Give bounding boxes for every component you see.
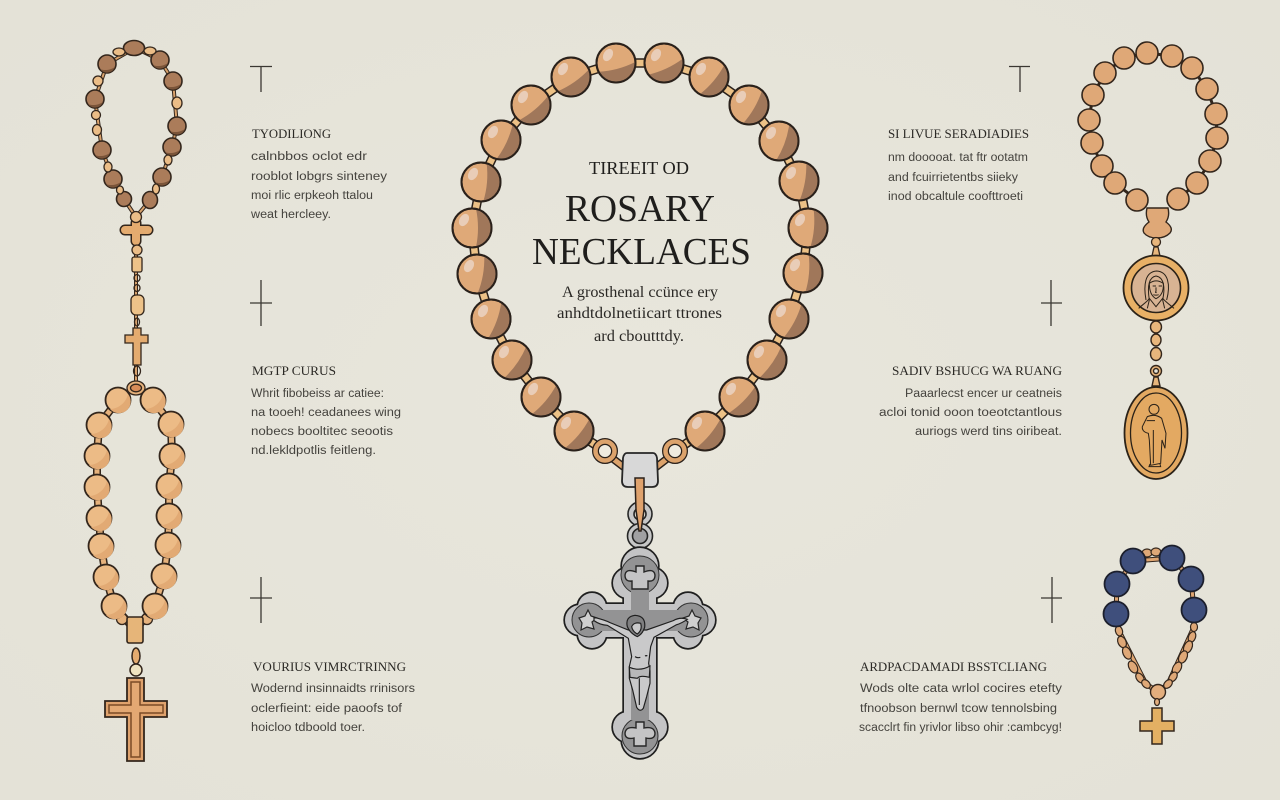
portrait of Mary bbox=[1139, 271, 1174, 308]
mini cross bbox=[1009, 66, 1030, 92]
text block 6: Wods olte cata wrlol cocires etefty bbox=[860, 683, 1062, 695]
text block 2: Whrit fibobeiss ar catiee: bbox=[251, 388, 384, 400]
text block 3: Wodernd insinnaidts rrinisors bbox=[251, 683, 415, 695]
junction bead bbox=[1150, 684, 1166, 706]
portrait medal bbox=[1124, 256, 1188, 320]
gold cross bbox=[1140, 708, 1174, 744]
text block 2: nobecs booltitec seootis bbox=[251, 426, 393, 438]
subtitle: A grosthenal ccünce ery bbox=[562, 284, 718, 301]
text block 4 bbox=[888, 126, 1029, 203]
upper small cross bbox=[125, 223, 148, 241]
crucified figure bbox=[594, 615, 687, 710]
jump rings bbox=[628, 502, 652, 548]
text block 2: MGTP CURUS bbox=[252, 363, 336, 378]
text block 3: hoicloo tdboold toer. bbox=[251, 722, 365, 734]
mini cross bbox=[250, 280, 272, 326]
top-left brown rosary bbox=[86, 40, 186, 395]
saint oval medal bbox=[1124, 387, 1188, 479]
text block 1: moi rlic erpkeoh ttalou bbox=[251, 190, 373, 202]
text block 1: rooblot lobgrs sinteney bbox=[251, 171, 387, 183]
barrel clasp bbox=[127, 617, 143, 643]
central title block bbox=[532, 158, 751, 345]
text block 1: calnbbos oclot edr bbox=[251, 151, 367, 163]
text block 2: nd.lekldpotlis feitleng. bbox=[251, 445, 376, 457]
text block 6: scacclrt fin yrivlor libso ohir :cambcyg! bbox=[859, 722, 1062, 734]
mini cross bbox=[1041, 577, 1062, 623]
text block 6 bbox=[859, 659, 1062, 734]
text block 3: VOURIUS VIMRCTRINNG bbox=[253, 659, 406, 674]
lower-right blue rosary bbox=[1104, 546, 1206, 744]
text block 2: na tooeh! ceadanees wing bbox=[251, 407, 401, 419]
wooden cross bbox=[105, 678, 167, 761]
text block 5: Paaarlecst encer ur ceatneis bbox=[905, 388, 1062, 400]
copper loop bbox=[635, 478, 644, 531]
text block 4: nm dooooat. tat ftr ootatm bbox=[888, 152, 1028, 164]
central rosary loop bbox=[452, 44, 829, 468]
upper-right rosary with medals bbox=[1078, 42, 1228, 479]
left text blocks bbox=[250, 66, 415, 734]
text block 4: SI LIVUE SERADIADIES bbox=[888, 126, 1029, 141]
mini cross bbox=[1041, 280, 1062, 326]
small link and ring bbox=[130, 648, 142, 676]
text block 3: oclerfieint: eide paoofs tof bbox=[251, 703, 403, 715]
cross body bbox=[565, 548, 715, 758]
text block 5 bbox=[879, 363, 1062, 438]
subtitle: anhdtdolnetiicart ttrones bbox=[557, 305, 722, 322]
text block 1 bbox=[250, 126, 387, 221]
chain beads bbox=[1150, 321, 1162, 386]
text block 3 bbox=[251, 659, 415, 734]
main title: NECKLACES bbox=[532, 231, 751, 273]
text block 6: ARDPACDAMADI BSSTCLIANG bbox=[860, 659, 1047, 674]
silver crucifix pendant bbox=[565, 453, 715, 758]
small links bbox=[1152, 238, 1160, 256]
text block 5: SADIV BSHUCG WA RUANG bbox=[892, 363, 1062, 378]
right text blocks bbox=[859, 66, 1062, 734]
lower-left tan rosary bbox=[84, 388, 185, 761]
text block 5: auriogs werd tins oiribeat. bbox=[915, 426, 1062, 438]
silver bail bbox=[622, 453, 658, 487]
text block 1: weat hercleey. bbox=[250, 209, 331, 221]
saint figure bbox=[1142, 404, 1166, 467]
subtitle: ard cboutttdy. bbox=[594, 328, 684, 345]
eyebrow: TIREEIT OD bbox=[589, 158, 689, 178]
main title: ROSARY bbox=[565, 188, 715, 230]
text block 6: tfnoobson bernwl tcow tennolsbing bbox=[860, 703, 1057, 715]
text block 1: TYODILIONG bbox=[252, 126, 331, 141]
text block 2 bbox=[251, 363, 401, 457]
text block 4: and fcuirrietentbs siieky bbox=[888, 172, 1018, 184]
mini cross bbox=[250, 66, 272, 92]
text block 5: acloi tonid ooon toeotctantlous bbox=[879, 407, 1062, 419]
mini cross bbox=[250, 577, 272, 623]
main title bbox=[532, 188, 751, 273]
subtitle bbox=[557, 284, 722, 345]
text block 4: inod obcaltule coofttroeti bbox=[888, 191, 1023, 203]
connector blob bbox=[1143, 208, 1171, 238]
